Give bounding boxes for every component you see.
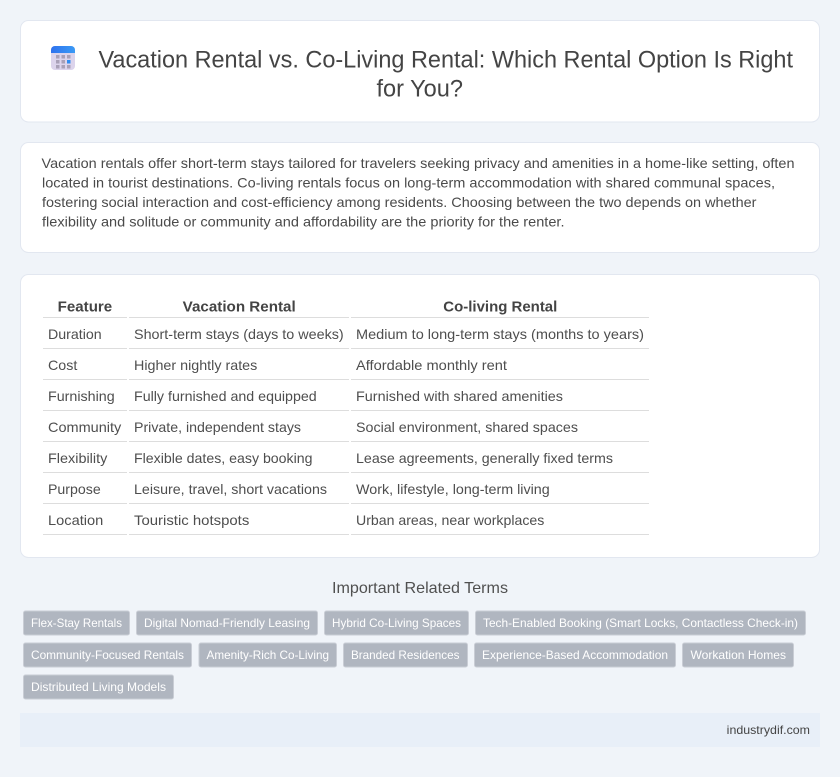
heading: important related terms: Important Related Terms	[332, 580, 508, 597]
tag: Distributed Living Models: Distributed Living Models	[31, 680, 166, 694]
text block: introduction paragraph: flexibility and solitude or community and affordability are the priority for the renter.	[42, 214, 564, 230]
table header: Vacation Rental	[183, 298, 296, 316]
tag: Experience-Based Accommodation: Experience-Based Accommodation	[482, 648, 668, 662]
tag: Branded Residences	[344, 643, 468, 667]
tag: Community-Focused Rentals	[24, 643, 192, 667]
tag: Flex-Stay Rentals	[24, 611, 130, 635]
tag: Branded Residences: Branded Residences	[351, 648, 460, 662]
icon: calendar	[51, 46, 75, 70]
tag: Workation Homes	[682, 643, 794, 667]
table row: Flexibility: Flexibility	[48, 450, 107, 466]
tag: Community-Focused Rentals: Community-Focused Rentals	[31, 648, 184, 662]
footer text: source: industrydif.com	[727, 723, 810, 737]
tag: Amenity-Rich Co-Living	[199, 643, 336, 667]
table row: Furnishing: Fully furnished and equipped	[134, 388, 317, 404]
table row: Duration	[43, 326, 649, 349]
tag: Amenity-Rich Co-Living: Amenity-Rich Co-Living	[206, 648, 329, 662]
table row: Duration: Short-term stays (days to weeks)	[134, 326, 344, 342]
text block: introduction paragraph: fostering social interaction and cost-efficiency among residents. Choosing between the two depends on whether	[42, 194, 757, 210]
table row: Flexibility: Lease agreements, generally fixed terms	[356, 450, 613, 466]
table row: Furnishing: Furnished with shared amenities	[356, 388, 563, 404]
table row: Cost: Higher nightly rates	[134, 357, 257, 373]
tag: Hybrid Co-Living Spaces	[324, 611, 468, 635]
tag: Distributed Living Models	[24, 675, 174, 699]
title: for You?	[376, 76, 463, 102]
title	[98, 46, 793, 102]
panel: comparison table	[20, 274, 820, 558]
text block: introduction paragraph: Vacation rentals offer short-term stays tailored for travelers seeking privacy and amenities in a home-like setting, often	[42, 155, 794, 171]
tag: Workation Homes: Workation Homes	[690, 648, 786, 662]
title: Vacation Rental vs. Co-Living Rental: Which Rental Option Is Right	[98, 46, 793, 74]
table row: Community	[43, 419, 649, 442]
text block: introduction paragraph: located in tourist destinations. Co-living rentals focus on long-term accommodation with shared communal spaces,	[42, 174, 775, 190]
table row: Community: Community	[48, 419, 121, 435]
table row: Purpose: Work, lifestyle, long-term living	[356, 481, 550, 497]
table row: Purpose	[43, 481, 649, 504]
table row: Cost	[43, 357, 649, 380]
tag: Hybrid Co-Living Spaces: Hybrid Co-Living Spaces	[332, 616, 461, 630]
table header	[43, 298, 649, 318]
tag: Experience-Based Accommodation	[474, 643, 676, 667]
table header: Feature	[58, 298, 112, 316]
table row: Purpose: Leisure, travel, short vacations	[134, 481, 327, 497]
panel: introduction	[20, 142, 820, 252]
tag: Digital Nomad-Friendly Leasing: Digital Nomad-Friendly Leasing	[144, 616, 310, 630]
table row: Furnishing	[43, 388, 649, 411]
table row: Flexibility	[43, 450, 649, 473]
table row: Location: Touristic hotspots	[134, 512, 249, 528]
table row: Community: Private, independent stays	[134, 419, 301, 435]
table header: Co-living Rental	[443, 298, 557, 316]
table row: Community: Social environment, shared spaces	[356, 419, 578, 435]
text block: introduction paragraph	[42, 155, 794, 230]
tag: Flex-Stay Rentals: Flex-Stay Rentals	[31, 616, 122, 630]
table row: Location: Location	[48, 512, 103, 528]
footer	[20, 713, 820, 747]
table row: Flexibility: Flexible dates, easy booking	[134, 450, 312, 466]
tag: Tech-Enabled Booking	[476, 611, 806, 635]
table row: Furnishing: Furnishing	[48, 388, 115, 404]
panel: header	[20, 20, 820, 122]
table row: Cost: Cost	[48, 357, 77, 373]
tag: Tech-Enabled Booking: Tech-Enabled Booking (Smart Locks, Contactless Check-in)	[483, 616, 798, 630]
table row: Purpose: Purpose	[48, 481, 101, 497]
tag list	[24, 611, 806, 699]
table row: Location	[43, 512, 649, 535]
table row: Location: Urban areas, near workplaces	[356, 512, 544, 528]
table row: Cost: Affordable monthly rent	[356, 357, 507, 373]
table row: Duration: Duration	[48, 326, 102, 342]
table row: Duration: Medium to long-term stays (months to years)	[356, 326, 644, 342]
tag: Digital Nomad-Friendly Leasing	[136, 611, 318, 635]
